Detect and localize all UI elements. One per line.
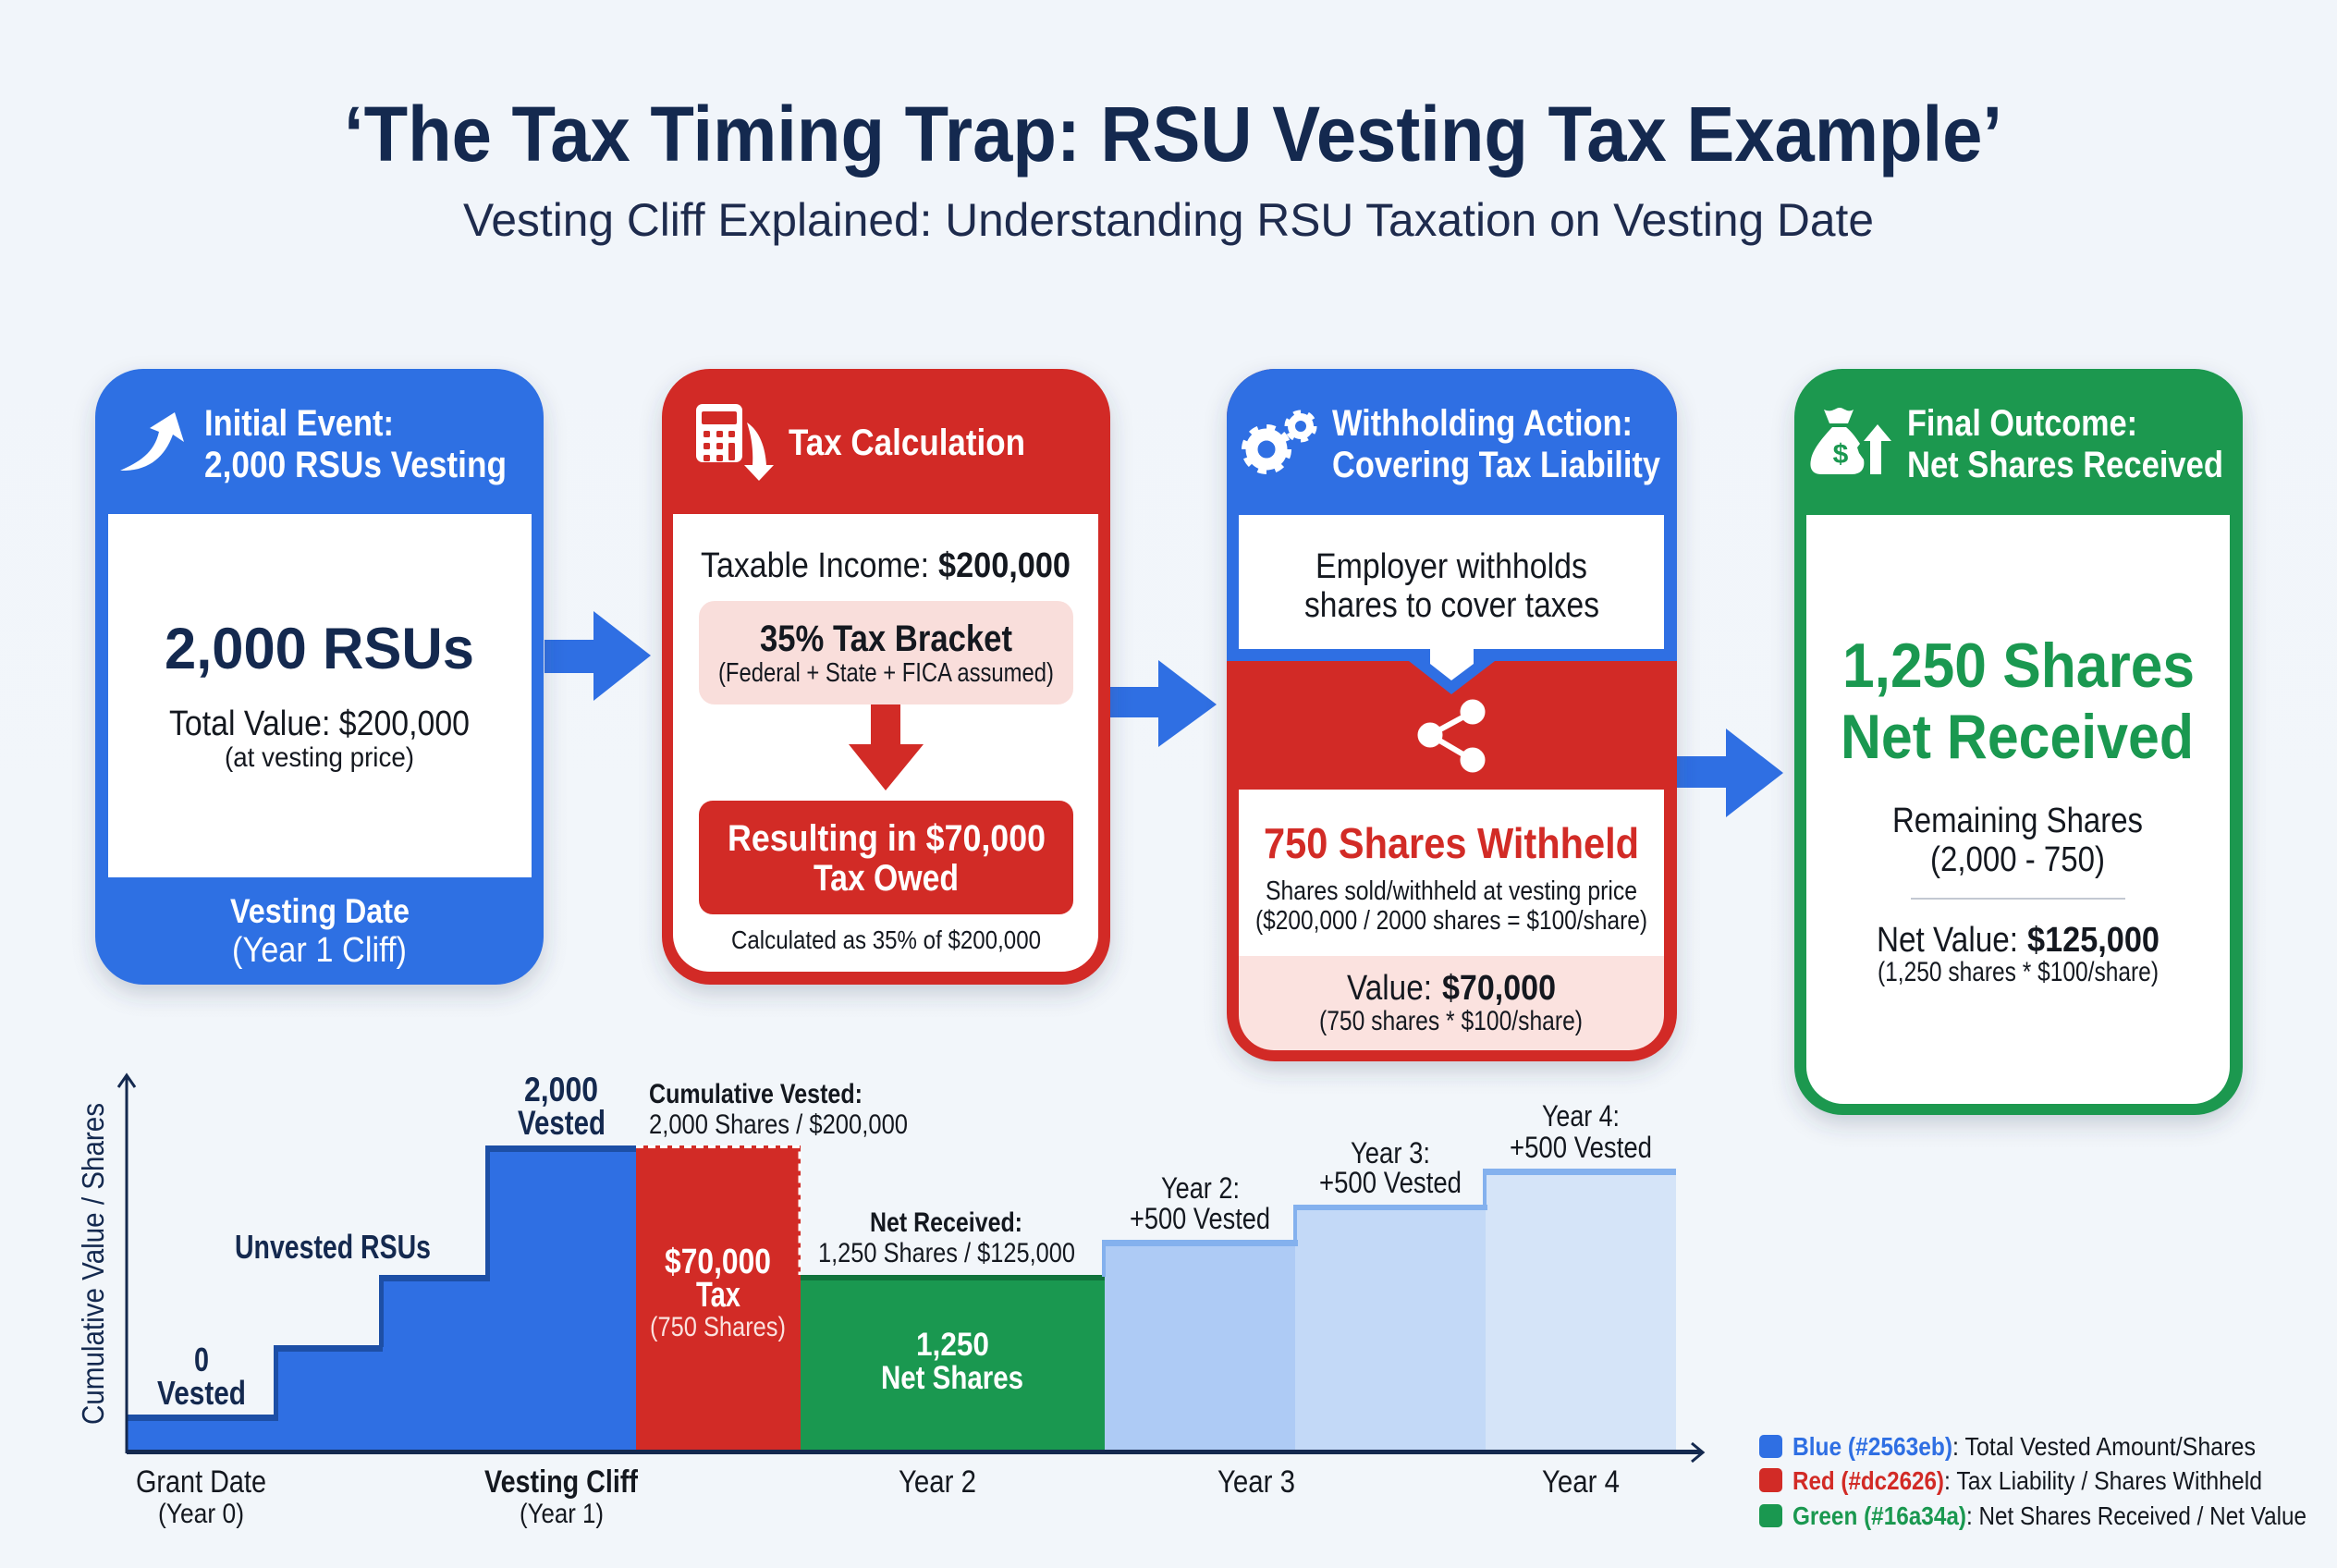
subtitle: Vesting Cliff Explained: Understanding RSU Taxation on Vesting Date	[463, 194, 1874, 246]
total value text: (at vesting price)	[225, 742, 414, 773]
employer text	[1304, 547, 1599, 625]
axes	[118, 1075, 1703, 1462]
panel: initial event	[95, 369, 544, 985]
total value text	[169, 704, 470, 773]
white section: shares withheld: 750 Shares Withheld	[1264, 819, 1639, 867]
label: cumulative vested: Cumulative Vested:	[649, 1079, 863, 1109]
label: 0 vested	[157, 1341, 246, 1412]
heading: final outcome: Net Shares Received	[1907, 445, 2223, 485]
label: unvested RSUs: Unvested RSUs	[235, 1228, 431, 1266]
heading: initial event: Initial Event:	[204, 403, 394, 444]
label: cumulative vested: 2,000 Shares / $200,000	[649, 1109, 908, 1140]
big number: net shares: Net Received	[1841, 702, 2194, 772]
legend item: blue: Blue (#2563eb)	[1793, 1432, 1952, 1461]
legend item: red: Red (#dc2626)	[1793, 1466, 1944, 1495]
label: year 3 vesting: Year 3:	[1351, 1136, 1430, 1170]
icon: money bag with arrow	[1810, 408, 1891, 474]
green net shares bar	[801, 1275, 1105, 1452]
net value text: $125,000	[2027, 921, 2160, 960]
callout: 35% tax bracket: 35% Tax Bracket	[760, 619, 1012, 659]
label: 2,000 vested: Vested	[518, 1104, 606, 1142]
legend item: red: : Tax Liability / Shares Withheld	[1944, 1466, 2262, 1495]
heading: withholding action: Withholding Action:	[1332, 403, 1633, 444]
red tax bar: Tax	[696, 1276, 740, 1315]
label: year 4 vesting	[1510, 1099, 1652, 1164]
legend item: red	[1759, 1466, 2262, 1495]
icon: gears	[1244, 412, 1315, 472]
net value text: Net Value:	[1877, 921, 2018, 960]
white section: shares withheld: Shares sold/withheld at vesting price	[1266, 876, 1637, 906]
footer: vesting date	[230, 892, 410, 970]
red tax bar: (750 Shares)	[650, 1312, 786, 1342]
remaining shares text: Remaining Shares	[1892, 802, 2143, 840]
pink section: withheld value: (750 shares * $100/share)	[1319, 1006, 1583, 1036]
taxable income line	[701, 546, 1071, 585]
arrow: event to calculation	[544, 611, 651, 701]
panel: withholding action	[1227, 369, 1677, 1061]
legend item: blue: : Total Vested Amount/Shares	[1952, 1432, 2256, 1461]
remaining shares text: (2,000 - 750)	[1930, 840, 2105, 879]
pink section: withheld value: Value:	[1347, 969, 1432, 1008]
label: year 2 vesting: +500 Vested	[1130, 1202, 1270, 1235]
total value text: Total Value: $200,000	[169, 704, 470, 743]
label: year 2 vesting: Year 2:	[1161, 1171, 1240, 1205]
green net shares bar: 1,250	[916, 1327, 989, 1363]
x-axis labels	[136, 1464, 1620, 1529]
panel: tax calculation	[662, 369, 1110, 985]
x-axis labels: Year 2	[899, 1464, 976, 1500]
arrow: down to result	[849, 704, 924, 790]
heading: initial event	[204, 403, 507, 485]
label: net received: 1,250 Shares / $125,000	[818, 1238, 1075, 1268]
legend item: green	[1759, 1501, 2306, 1530]
panel: final outcome	[1794, 369, 2243, 1115]
pink section: withheld value	[1239, 956, 1664, 1050]
heading: tax calculation: Tax Calculation	[789, 423, 1025, 463]
label: year 3 vesting	[1319, 1136, 1462, 1199]
label: year 4 vesting: Year 4:	[1542, 1099, 1620, 1133]
x-axis labels: Year 3	[1217, 1464, 1295, 1500]
axis title: Cumulative Value / Shares	[76, 1103, 110, 1425]
red tax bar	[636, 1145, 801, 1452]
net value text: (1,250 shares * $100/share)	[1878, 957, 2159, 987]
label: 0 vested: Vested	[157, 1374, 246, 1412]
label: net received: Net Received:	[870, 1207, 1022, 1238]
employer text: shares to cover taxes	[1304, 586, 1599, 625]
label: year 2 vesting	[1130, 1171, 1270, 1235]
big number: 2,000 RSUs: 2,000 RSUs	[165, 617, 474, 681]
x-axis labels: Year 4	[1542, 1464, 1620, 1500]
label: 2,000 vested: 2,000	[524, 1071, 598, 1109]
x-axis labels: (Year 1)	[520, 1499, 604, 1529]
big number: net shares	[1841, 631, 2195, 772]
label: 2,000 vested	[518, 1071, 606, 1142]
red tax bar: $70,000	[665, 1243, 771, 1281]
icon: calculator with arrow	[696, 404, 774, 481]
label: 0 vested: 0	[194, 1341, 209, 1378]
x-axis labels: Grant Date	[136, 1464, 266, 1500]
callout: 35% tax bracket	[699, 601, 1073, 704]
heading: withholding action	[1332, 403, 1661, 485]
label: year 3 vesting: +500 Vested	[1319, 1166, 1462, 1199]
taxable income line: Taxable Income:	[701, 546, 929, 585]
employer text: Employer withholds	[1315, 547, 1587, 586]
label: cumulative vested	[649, 1079, 908, 1140]
heading: initial event: 2,000 RSUs Vesting	[204, 445, 507, 485]
icon: rising arrow	[120, 412, 184, 471]
label: year 4 vesting: +500 Vested	[1510, 1131, 1652, 1164]
chart: vesting step chart	[76, 1071, 1703, 1529]
footer: vesting date: (Year 1 Cliff)	[232, 931, 407, 970]
blue vested steps	[127, 1145, 636, 1452]
remaining shares text	[1892, 802, 2143, 879]
heading: final outcome: Final Outcome:	[1907, 403, 2137, 444]
net value text	[1877, 921, 2160, 987]
heading: withholding action: Covering Tax Liability	[1332, 445, 1661, 485]
white section: shares withheld	[1239, 790, 1664, 956]
arrow: calculation to withholding	[1110, 660, 1217, 747]
legend	[1759, 1432, 2306, 1530]
calculation note: Calculated as 35% of $200,000	[731, 925, 1041, 954]
x-axis labels: Vesting Cliff	[484, 1464, 639, 1500]
callout: tax owed: Tax Owed	[814, 858, 959, 899]
callout: tax owed	[699, 801, 1073, 914]
title: ‘The Tax Timing Trap: RSU Vesting Tax Example’	[344, 91, 2002, 178]
big number: net shares: 1,250 Shares	[1842, 631, 2195, 701]
taxable income line: $200,000	[938, 546, 1071, 585]
callout: tax owed: Resulting in $70,000	[728, 818, 1046, 859]
x-axis labels: (Year 0)	[158, 1499, 244, 1529]
heading: final outcome	[1907, 403, 2223, 485]
pink section: withheld value: $70,000	[1442, 969, 1556, 1008]
white section: shares withheld: ($200,000 / 2000 shares = $100/share)	[1255, 906, 1647, 936]
footer: vesting date: Vesting Date	[230, 892, 410, 930]
icon: share nodes	[1418, 700, 1485, 772]
callout: 35% tax bracket: (Federal + State + FICA assumed)	[718, 658, 1054, 688]
light blue future vesting bars	[1102, 1169, 1676, 1452]
label: net received	[818, 1207, 1075, 1268]
legend item: blue	[1759, 1432, 2256, 1461]
icon: money bag with arrow: $	[1833, 439, 1849, 470]
legend item: green: Green (#16a34a)	[1793, 1501, 1966, 1530]
green net shares bar: Net Shares	[881, 1360, 1023, 1396]
arrow: withholding to outcome	[1677, 729, 1783, 817]
